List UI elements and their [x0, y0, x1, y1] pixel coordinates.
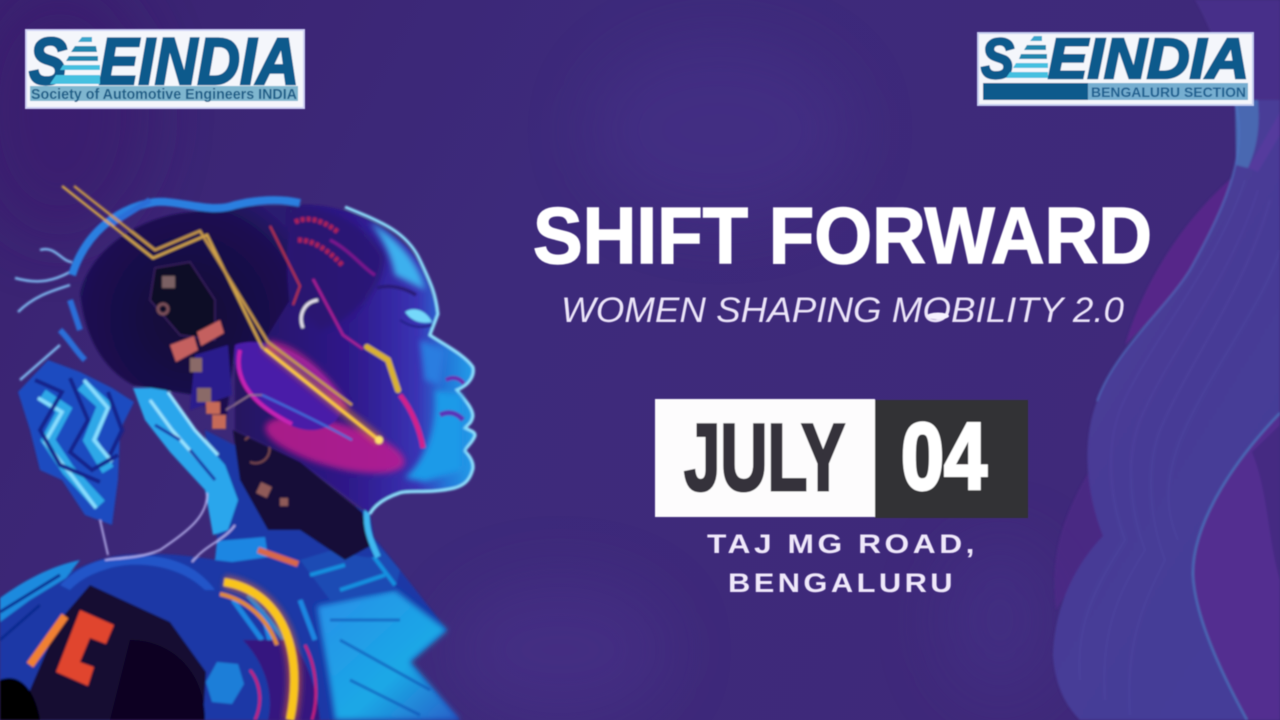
- face: [235, 205, 475, 514]
- hair circuit chips: [150, 262, 262, 429]
- day panel: [875, 400, 1028, 518]
- icon: car swoosh in letter O: [927, 312, 949, 320]
- logo: SAEINDIA Society of Automotive Engineers INDIA: S: [29, 24, 67, 98]
- face circuit traces: [270, 219, 423, 448]
- day text: 04: [901, 404, 987, 510]
- face rim light: [345, 207, 475, 514]
- neck: [205, 430, 377, 557]
- logo: SAEINDIA Society of Automotive Engineers INDIA: EINDIA: [99, 24, 299, 98]
- logo: SAEINDIA Society of Automotive Engineers INDIA: [26, 24, 304, 108]
- venue: BENGALURU: [728, 568, 956, 598]
- gold circuit trace: [62, 186, 383, 444]
- logo: SAEINDIA Bengaluru Section: EINDIA: [1048, 27, 1249, 91]
- magenta circuit panel: [243, 640, 320, 720]
- eye and brow: [377, 286, 464, 420]
- ear circuit: [234, 342, 352, 440]
- month text: JULY: [684, 405, 845, 511]
- hexagon plate: [206, 662, 244, 704]
- forehead shadow: [290, 209, 385, 330]
- venue: TAJ MG ROAD,: [707, 529, 978, 559]
- subtitle: WOMEN SHAPING MOBILITY 2.0: [561, 291, 1125, 330]
- striped letter A (right logo): [1006, 36, 1048, 78]
- title: SHIFT FORWARD: [533, 191, 1152, 280]
- hair mass: [80, 206, 300, 430]
- striped letter A: [50, 37, 100, 84]
- cheek magenta glow: [260, 405, 410, 485]
- date badge: [655, 399, 1028, 518]
- logo: SAEINDIA Bengaluru Section: [978, 27, 1253, 105]
- decorative wave ribbons: [1053, 0, 1280, 720]
- logo: SAEINDIA Bengaluru Section: BENGALURU SECTION: [1091, 85, 1246, 100]
- woman profile illustration: [0, 186, 475, 720]
- shoulder and torso: [0, 530, 460, 720]
- curly ponytail: [15, 249, 134, 525]
- white cord: [100, 493, 235, 562]
- logo: SAEINDIA Bengaluru Section: S: [981, 27, 1014, 91]
- cyan skin highlights: [370, 222, 462, 482]
- chest highlights: [0, 537, 460, 720]
- month panel: [655, 399, 875, 517]
- dark module with red C: [0, 585, 206, 720]
- venue: [707, 529, 978, 598]
- yellow glowing arc: [220, 550, 298, 720]
- neck hair strands: [133, 388, 238, 535]
- logo: SAEINDIA Society of Automotive Engineers INDIA: Society of Automotive Engineers INDIA: [31, 87, 298, 103]
